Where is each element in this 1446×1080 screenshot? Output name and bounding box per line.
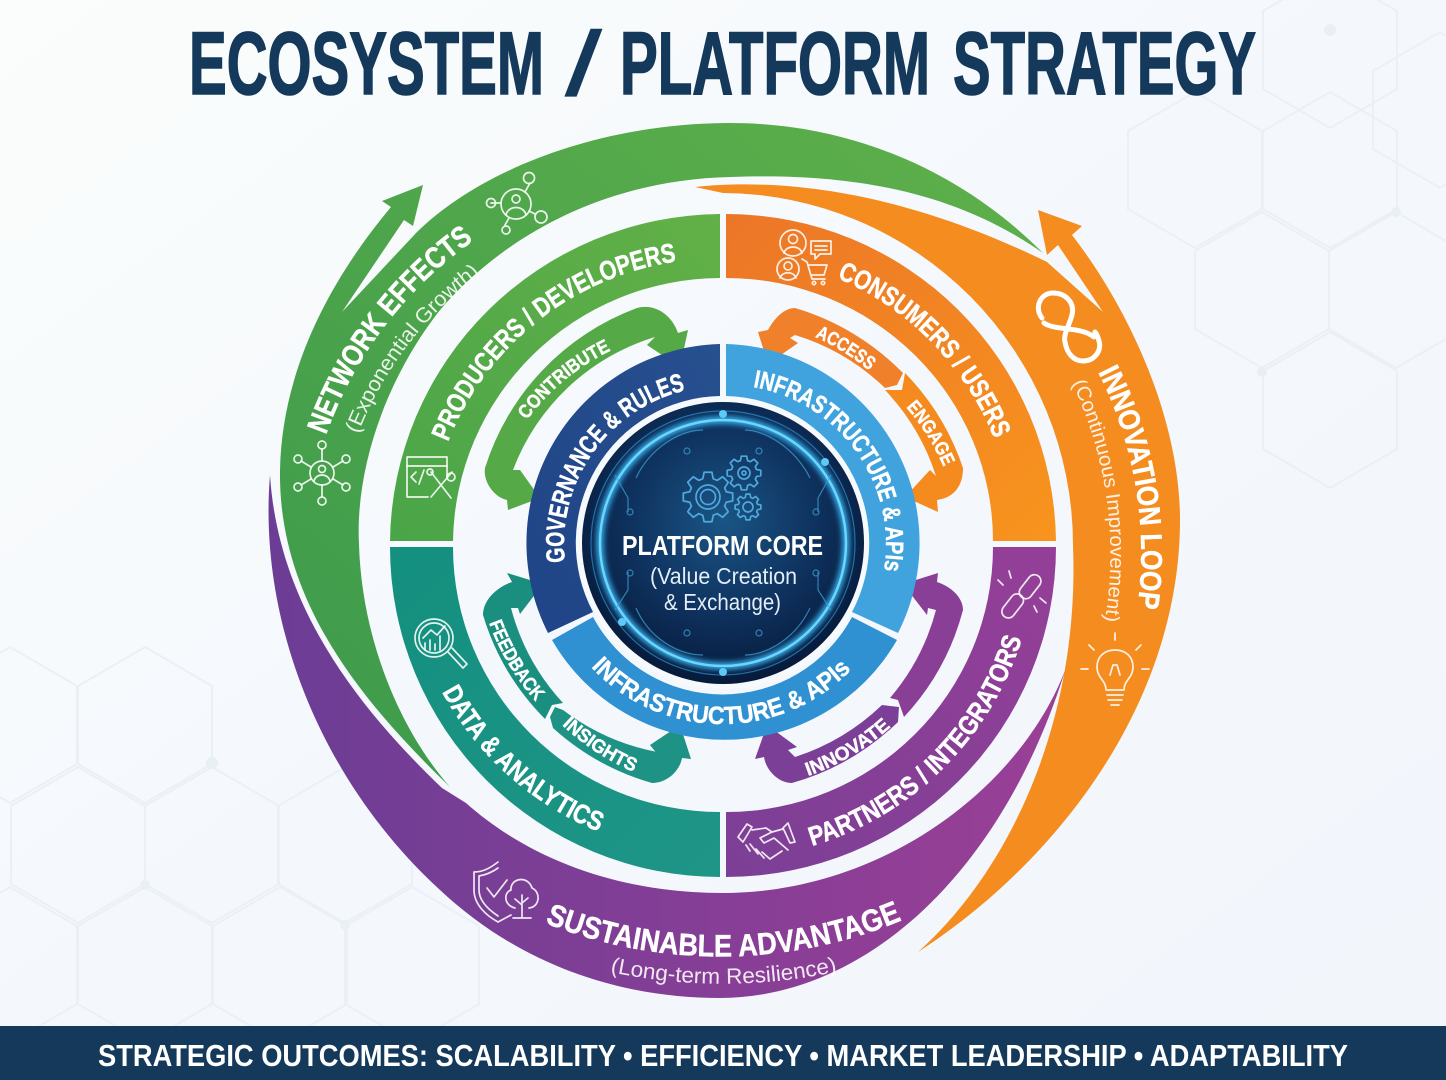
title: ECOSYSTEM: [189, 13, 544, 113]
background hexagon pattern, bottom left: [0, 647, 479, 1043]
label: continuous improvement: (Continuous Improvement): [1070, 380, 1121, 621]
platform core: [577, 397, 869, 689]
label: infrastructure & APIs bottom: INFRASTRUCTURE & APIs: [592, 656, 850, 724]
label: data & analytics: DATA & ANALYTICS: [442, 684, 604, 830]
title: PLATFORM: [620, 13, 930, 113]
inner ring segment: governance & rules: [526, 344, 720, 633]
label: producers / developers: PRODUCERS / DEVELOPERS: [431, 244, 676, 441]
title: [189, 13, 1256, 114]
label: engage: ENGAGE: [906, 399, 956, 466]
icon: chain link: [998, 571, 1046, 621]
label: access: ACCESS: [815, 326, 876, 370]
title: STRATEGY: [953, 13, 1256, 113]
icon: shield and tree: [474, 862, 538, 922]
icon: network top: [486, 172, 547, 234]
ring segment: consumers / users: [726, 214, 1056, 541]
ring segment: data & analytics: [390, 547, 720, 877]
label: sustainable advantage: SUSTAINABLE ADVANTAGE: [547, 900, 902, 957]
core heading: PLATFORM CORE: [622, 530, 823, 561]
icon: handshake: [738, 823, 795, 859]
outer arrow: network effects: [280, 123, 1043, 787]
glowing nodes: [618, 410, 829, 676]
middle arrow: access / engage: [758, 308, 963, 512]
circuit traces: [615, 430, 831, 655]
background hexagon pattern, top right: [1128, 0, 1446, 488]
label: consumers / users: CONSUMERS / USERS: [840, 263, 1010, 437]
label: governance & rules: GOVERNANCE & RULES: [546, 374, 684, 562]
label: infrastructure & APIs right: INFRASTRUCTURE & APIs: [754, 370, 904, 571]
icon: light bulb: [1081, 633, 1149, 705]
label: insights: INSIGHTS: [562, 716, 638, 771]
core subheading line 1: (Value Creation: [650, 563, 797, 589]
inner ring segment: infrastructure & APIs bottom: [552, 617, 897, 740]
label: exponential growth: (Exponential Growth): [346, 265, 478, 432]
icon: code window and tools: [407, 457, 455, 498]
icon: users, chat and cart: [777, 230, 831, 285]
outer arrow: innovation loop: [695, 184, 1180, 952]
core subheading line 2: & Exchange): [664, 589, 781, 615]
middle arrow: contribute: [484, 306, 688, 510]
label: long-term resilience: (Long-term Resilience): [612, 957, 836, 985]
icon: infinity loop: [1038, 293, 1100, 361]
inner ring segment: infrastructure & APIs right: [726, 344, 920, 633]
icon: magnifier with chart: [415, 619, 467, 668]
icon: network left: [294, 441, 350, 505]
label: contribute: CONTRIBUTE: [518, 338, 610, 418]
label: innovate: INNOVATE: [804, 717, 891, 776]
label: innovation loop: INNOVATION LOOP: [1098, 364, 1162, 609]
icon: gears: [683, 456, 761, 522]
label: network effects: NETWORK EFFECTS: [306, 226, 471, 434]
label: feedback: FEEDBACK: [489, 619, 546, 702]
title: /: [561, 15, 605, 114]
outer arrow: sustainable advantage: [268, 476, 1065, 998]
middle arrow: innovate: [755, 573, 963, 783]
ring segment: partners / integrators: [726, 547, 1056, 877]
label: partners / integrators: PARTNERS / INTEGRATORS: [808, 635, 1021, 846]
ring segment: producers / developers: [390, 214, 720, 541]
middle arrow: feedback / insights: [483, 573, 691, 783]
footer bar: [0, 1026, 1446, 1080]
